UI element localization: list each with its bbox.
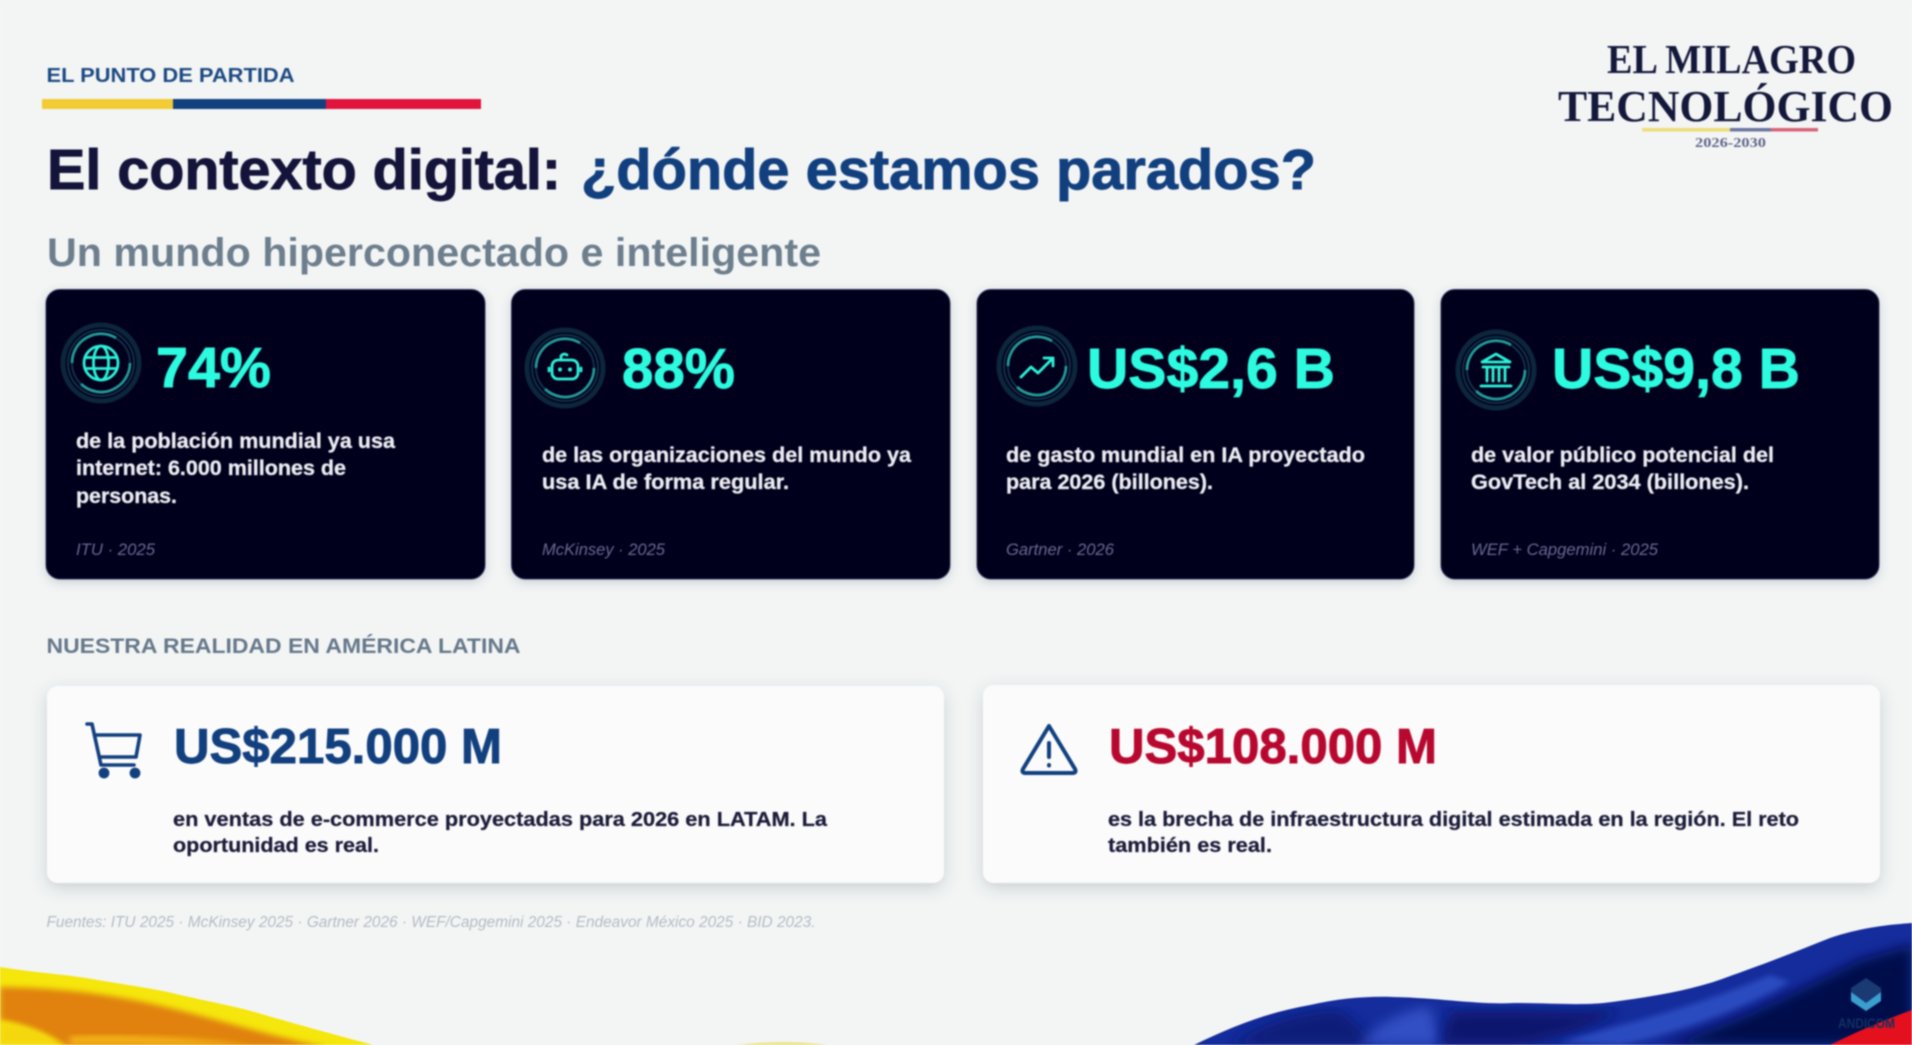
panel: e-commerce	[47, 686, 944, 883]
description: oportunidad es real.	[173, 834, 379, 857]
panel: stat US$2,6 B	[977, 290, 1414, 579]
title: El contexto digital:	[47, 138, 561, 202]
description	[542, 444, 911, 494]
stat value: 74%	[156, 336, 271, 400]
panel: infrastructure gap	[983, 685, 1880, 883]
description: personas.	[76, 485, 177, 508]
decorative flag wave: yellow	[0, 960, 827, 1045]
description	[76, 430, 395, 508]
icon: warning triangle	[1022, 726, 1076, 773]
description: de las organizaciones del mundo ya	[542, 444, 911, 467]
stat value: 88%	[622, 337, 735, 401]
icon: robot	[527, 330, 603, 406]
icon: government building	[1458, 332, 1534, 408]
description: usa IA de forma regular.	[542, 471, 789, 494]
decorative flag wave: blue and red	[1190, 920, 1912, 1045]
sources footnote: Fuentes: ITU 2025 · McKinsey 2025 · Gartner 2026 · WEF/Capgemini 2025 · Endeavor México 2025 · BID 2023.	[46, 914, 816, 931]
description	[1471, 444, 1774, 494]
logo: El Milagro Tecnológico: EL MILAGRO	[1607, 36, 1856, 82]
section heading: NUESTRA REALIDAD EN AMÉRICA LATINA	[46, 635, 520, 658]
tricolor rule	[42, 99, 481, 109]
title	[47, 138, 1316, 202]
source: ITU · 2025	[76, 540, 156, 559]
watermark: Andicom logo	[1838, 978, 1895, 1031]
description: para 2026 (billones).	[1006, 471, 1213, 494]
value: US$215.000 M	[174, 720, 502, 774]
logo: El Milagro Tecnológico: 2026-2030	[1695, 136, 1766, 151]
description: de gasto mundial en IA proyectado	[1006, 444, 1365, 467]
source: McKinsey · 2025	[542, 540, 666, 559]
description: es la brecha de infraestructura digital estimada en la región. El reto	[1108, 808, 1799, 831]
description	[1006, 444, 1365, 494]
panel: stat US$9,8 B	[1441, 290, 1879, 579]
panel: stat 88%	[512, 290, 950, 579]
watermark: Andicom logo: ANDICOM	[1838, 1016, 1895, 1031]
description: de valor público potencial del	[1471, 444, 1774, 467]
value: US$108.000 M	[1109, 720, 1437, 774]
title: ¿dónde estamos parados?	[581, 138, 1316, 202]
source: WEF + Capgemini · 2025	[1471, 540, 1659, 559]
logo: El Milagro Tecnológico	[1558, 36, 1893, 151]
description	[1108, 808, 1799, 857]
kicker: el punto de partida: EL PUNTO DE PARTIDA	[46, 64, 295, 87]
icon: shopping cart	[87, 724, 140, 777]
subtitle: Un mundo hiperconectado e inteligente	[47, 231, 821, 275]
logo: El Milagro Tecnológico: TECNOLÓGICO	[1558, 82, 1893, 131]
description: también es real.	[1108, 834, 1272, 857]
panel: stat 74%	[46, 290, 485, 579]
description: de la población mundial ya usa	[76, 430, 395, 453]
description: internet: 6.000 millones de	[76, 457, 346, 480]
description	[173, 808, 828, 857]
icon: globe	[63, 325, 139, 401]
stat value: US$2,6 B	[1087, 337, 1335, 401]
description: GovTech al 2034 (billones).	[1471, 471, 1749, 494]
description: en ventas de e-commerce proyectadas para 2026 en LATAM. La	[173, 808, 828, 831]
source: Gartner · 2026	[1006, 540, 1115, 559]
stat value: US$9,8 B	[1552, 337, 1800, 401]
icon: trend chart	[999, 328, 1075, 404]
